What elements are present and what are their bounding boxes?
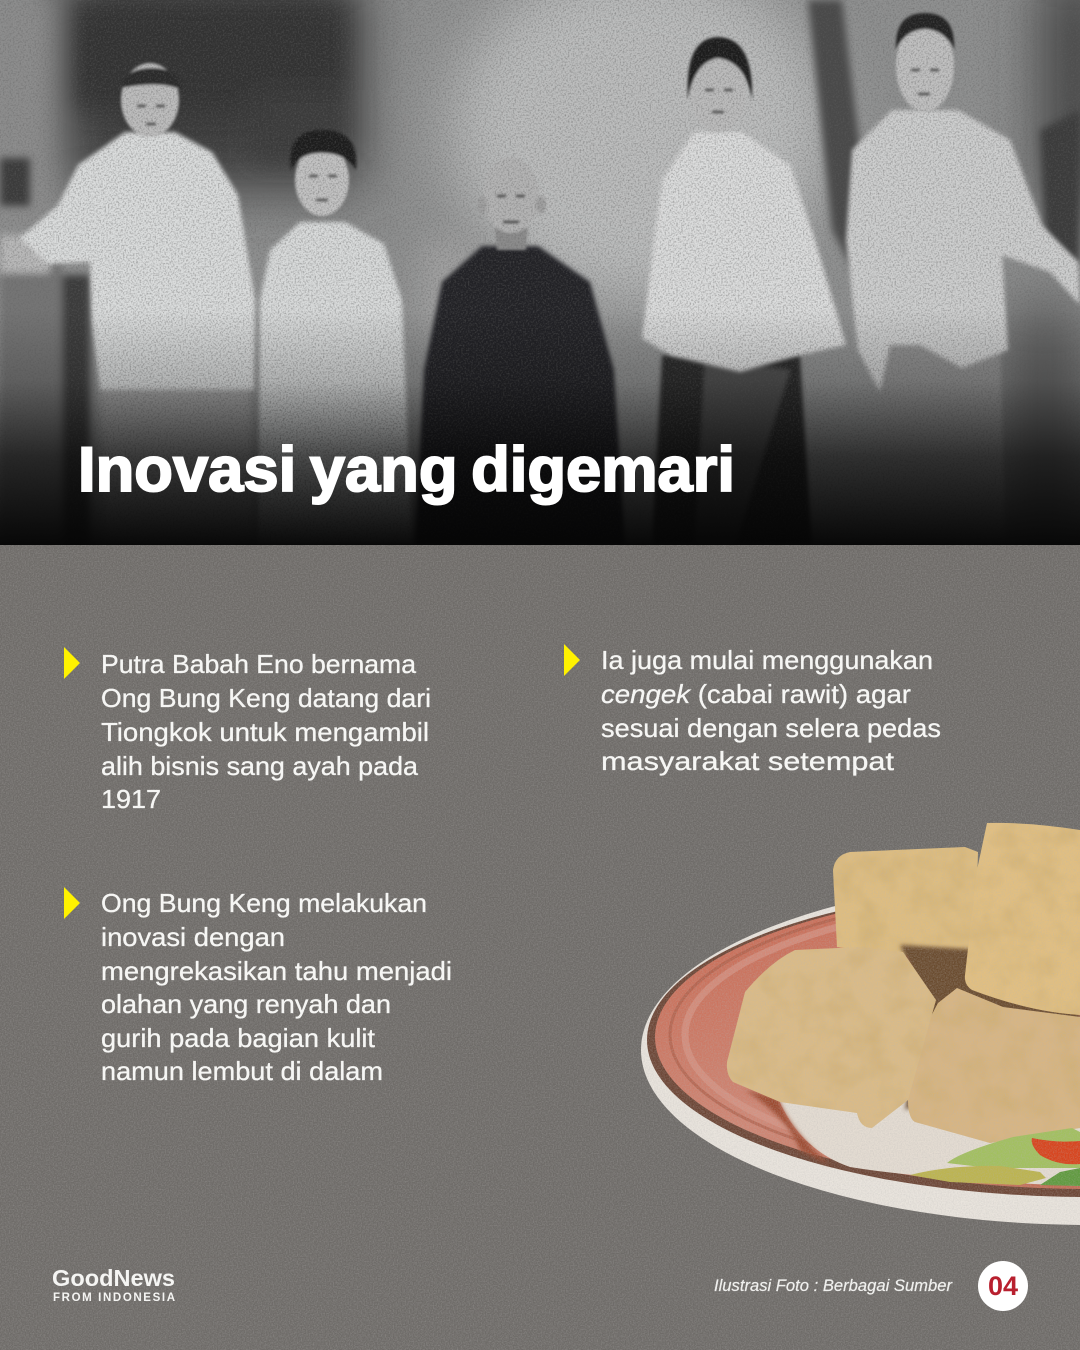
icon: yellow arrow marker <box>564 644 580 676</box>
noise grain over lower panel <box>0 545 1080 1350</box>
text block: Ong Bung Keng arrival: 1917 <box>101 784 161 814</box>
person 2: younger boy in white <box>258 130 412 545</box>
painted backdrop tree trunk <box>808 0 864 280</box>
tofu front left block <box>727 947 936 1128</box>
tofu back block <box>833 847 978 958</box>
icon: yellow arrow marker <box>64 887 80 919</box>
person 4: woman in white kebaya and batik skirt <box>642 37 846 545</box>
tofu shadow underlay <box>900 945 1080 1110</box>
side table left <box>0 158 90 550</box>
text block: Ong Bung Keng arrival: alih bisnis sang ayah pada <box>101 751 419 781</box>
text block: Ong Bung Keng arrival: Ong Bung Keng datang dari <box>101 683 431 713</box>
text block: Ong Bung Keng arrival <box>101 649 431 814</box>
plate <box>641 875 1080 1225</box>
text block: fried tofu innovation: mengrekasikan tahu menjadi <box>101 956 452 986</box>
dark foliage right edge <box>1040 110 1080 265</box>
text block: Ong Bung Keng arrival: Putra Babah Eno bernama <box>101 649 417 679</box>
bullet point 2 <box>64 887 452 1086</box>
bullet point 3 <box>564 644 941 776</box>
GoodNews from Indonesia logo <box>52 1265 175 1304</box>
text block: fried tofu innovation: gurih pada bagian kulit <box>101 1023 376 1053</box>
text block: cengek chili: Ia juga mulai menggunakan <box>601 645 933 675</box>
icon: yellow arrow marker <box>64 647 80 679</box>
bullet point 1 <box>64 647 431 814</box>
text block: fried tofu innovation: Ong Bung Keng melakukan <box>101 888 427 918</box>
GoodNews from Indonesia logo: FROM INDONESIA <box>53 1292 175 1304</box>
text block: cengek chili: cengek (cabai rawit) agar <box>601 679 911 709</box>
text block: fried tofu innovation <box>101 888 452 1086</box>
text block: fried tofu innovation: olahan yang renyah dan <box>101 989 391 1019</box>
text block: cengek chili: sesuai dengan selera pedas <box>601 713 941 743</box>
plate of fried tofu illustration <box>641 823 1080 1225</box>
historic family photograph <box>0 0 1080 550</box>
person 1: tall boy in white <box>20 61 258 462</box>
GoodNews from Indonesia logo: GoodNews <box>52 1265 175 1291</box>
page number badge: 04 <box>988 1271 1018 1301</box>
text block: fried tofu innovation: inovasi dengan <box>101 922 285 952</box>
page number badge <box>978 1261 1028 1311</box>
person 3: seated elder in dark robe <box>415 157 625 545</box>
text block: Ong Bung Keng arrival: Tiongkok untuk mengambil <box>101 717 429 747</box>
text block: cengek chili: masyarakat setempat <box>601 746 895 776</box>
title: Inovasi yang digemari <box>78 435 735 505</box>
tofu front right block <box>908 988 1080 1143</box>
photo credit: Ilustrasi Foto : Berbagai Sumber <box>714 1276 953 1295</box>
text block: cengek chili <box>601 645 941 776</box>
background panel <box>0 545 1080 1350</box>
text block: fried tofu innovation: namun lembut di dalam <box>101 1056 383 1086</box>
person 5: tall young man in white jacket <box>843 11 1080 448</box>
garnish: green vegetables and chili <box>910 1128 1080 1186</box>
tofu right block <box>965 823 1080 1015</box>
